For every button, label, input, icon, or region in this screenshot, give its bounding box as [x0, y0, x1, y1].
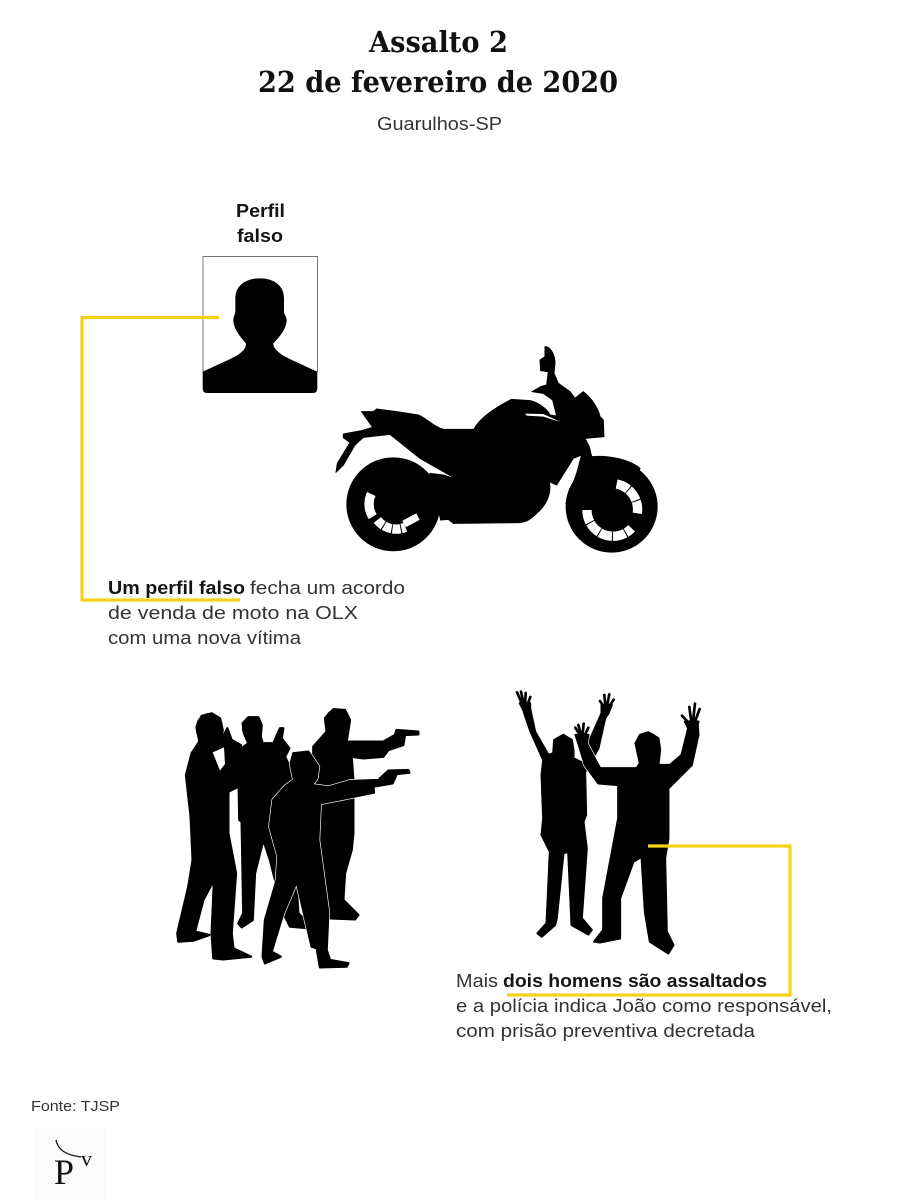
figure: man in front [263, 752, 409, 967]
title [258, 25, 618, 99]
title: 22 de fevereiro de 2020 [258, 65, 618, 99]
figure: man at the back [517, 692, 614, 937]
text: dois homens: Mais [456, 970, 498, 991]
text: dois homens [456, 970, 832, 1041]
logo [35, 1128, 107, 1200]
logo: P [54, 1152, 74, 1192]
logo: v [81, 1146, 92, 1171]
title: Assalto 2 [368, 25, 508, 59]
front wheel [566, 461, 658, 553]
text: dois homens: e a polícia indica João como responsável, [456, 995, 832, 1016]
text: dois homens: com prisão preventiva decretada [456, 1020, 756, 1041]
illustration: four armed men [177, 708, 418, 967]
heading: perfil falso: Perfil [236, 200, 285, 221]
heading: perfil falso: falso [237, 225, 283, 246]
text: um perfil falso: de venda de moto na OLX [108, 602, 358, 623]
figure: man at far left [177, 713, 251, 959]
subtitle: location: Guarulhos-SP [377, 113, 502, 134]
figure: man on the right [313, 708, 418, 919]
text: um perfil falso [108, 577, 405, 648]
connector: men to text [507, 846, 790, 995]
text: dois homens: dois homens são assaltados [503, 970, 767, 991]
text: um perfil falso: Um perfil falso [108, 577, 245, 598]
illustration: two men with hands raised [517, 692, 700, 953]
icon: fake profile portrait [203, 256, 318, 393]
heading: perfil falso [236, 200, 285, 246]
connector: profile to text [82, 318, 240, 600]
rear wheel [346, 457, 440, 551]
source: Fonte: TJSP [31, 1098, 120, 1115]
text: um perfil falso: com uma nova vítima [108, 627, 302, 648]
figure: second man [238, 717, 310, 928]
text: um perfil falso: fecha um acordo [250, 577, 405, 598]
icon: motorcycle [336, 347, 658, 553]
figure: man in front [575, 704, 700, 953]
